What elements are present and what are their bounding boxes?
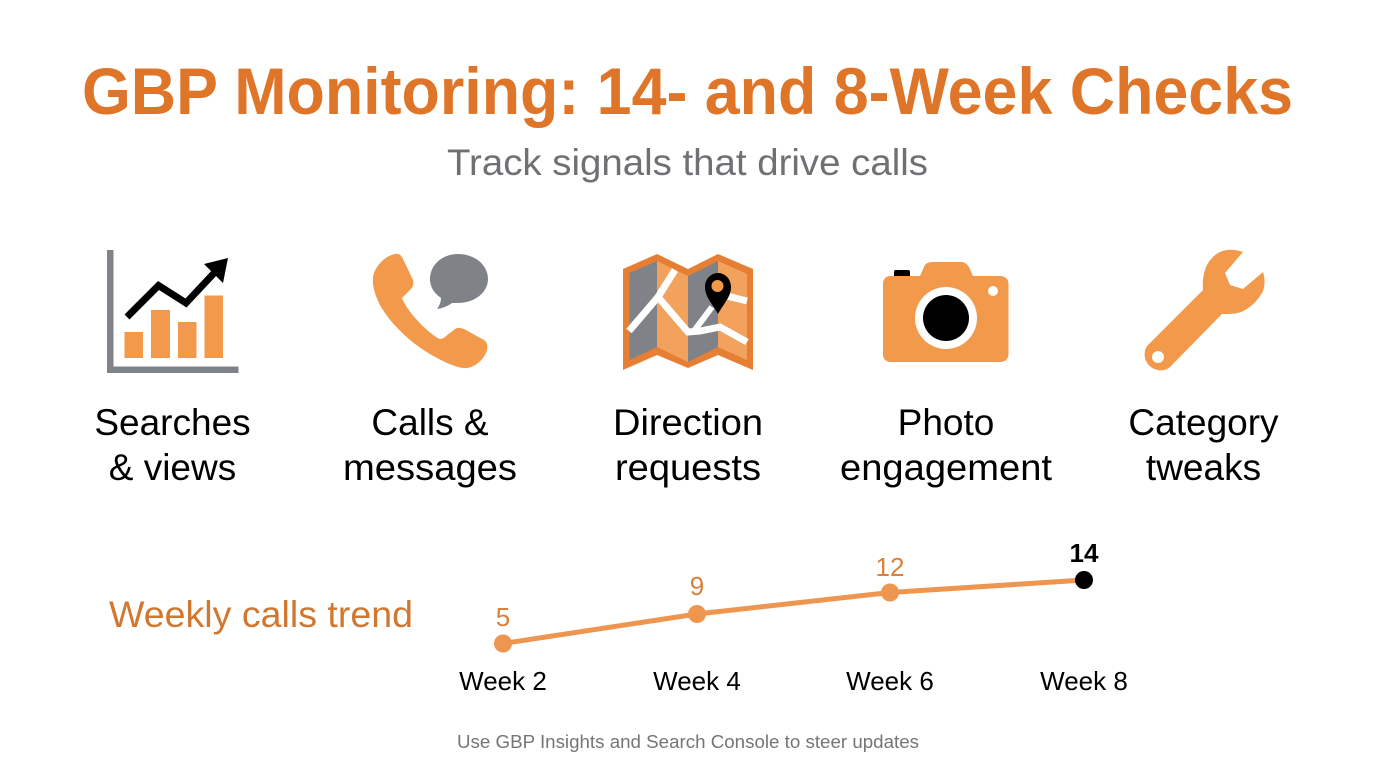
label: calls and messages: messages (343, 447, 517, 488)
subtitle: Track signals that drive calls (447, 142, 928, 183)
label: calls and messages (343, 402, 517, 488)
line chart: weekly calls: 14 (1070, 538, 1099, 568)
line chart: weekly calls: Week 8 (1040, 666, 1128, 696)
icon: chart with rising arrow (107, 250, 238, 373)
label: photo engagement: Photo (898, 402, 994, 443)
label: category tweaks: Category (1128, 402, 1279, 443)
line chart: weekly calls: Week 4 (653, 666, 741, 696)
label: searches and views (94, 402, 251, 488)
label: photo engagement: engagement (840, 447, 1053, 488)
label: category tweaks: tweaks (1146, 447, 1261, 488)
chart heading: weekly calls trend: Weekly calls trend (109, 594, 413, 635)
label: searches and views: & views (109, 447, 236, 488)
line chart: weekly calls: Week 6 (846, 666, 934, 696)
line chart: weekly calls: 5 (496, 602, 510, 632)
icon: camera (883, 262, 1008, 362)
line chart: weekly calls: 12 (876, 552, 904, 582)
label: direction requests (613, 402, 763, 488)
footer note: Use GBP Insights and Search Console to steer updates (457, 732, 919, 752)
line chart: weekly calls: Week 2 (459, 666, 547, 696)
label: category tweaks (1128, 402, 1279, 488)
label: calls and messages: Calls & (371, 402, 489, 443)
label: direction requests: requests (615, 447, 761, 488)
line chart: weekly calls: 9 (690, 571, 704, 601)
label: direction requests: Direction (613, 402, 763, 443)
line chart: weekly calls (459, 538, 1128, 696)
icon: wrench (1145, 250, 1264, 370)
icon: folded map with pin (623, 254, 753, 370)
icon: phone and speech bubble (373, 254, 488, 368)
label: searches and views: Searches (94, 402, 251, 443)
label: photo engagement (840, 402, 1053, 488)
title: GBP Monitoring: 14- and 8-Week Checks (82, 54, 1293, 128)
